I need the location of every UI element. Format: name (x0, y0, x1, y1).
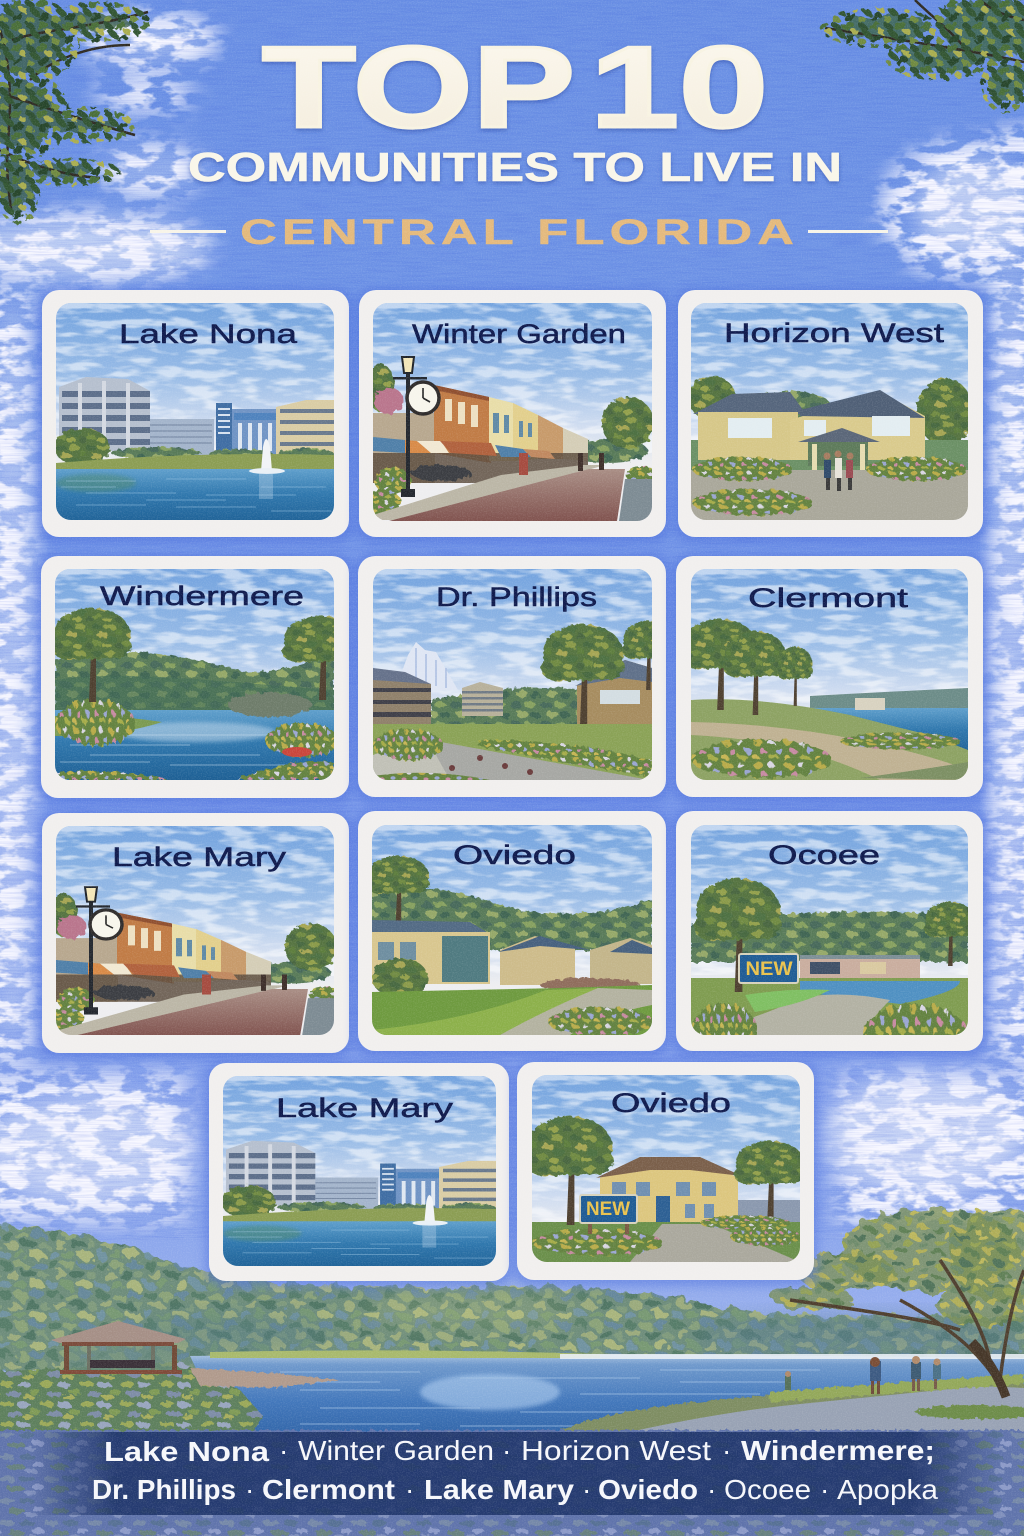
people on path (785, 1356, 941, 1394)
label: Lake Nona: Lake Nona (119, 319, 298, 349)
panel: Dr. Phillips (354, 554, 674, 803)
bottom list band (30, 1432, 1000, 1515)
panel: Lake Mary lakefront (205, 1061, 513, 1287)
illustration: home with NEW sign (526, 1075, 814, 1297)
walking path and bank (552, 1374, 1024, 1442)
corner tree: top left (0, 0, 150, 224)
label: Windermere: Windermere (100, 581, 304, 611)
list line 1: · (722, 1435, 731, 1466)
list line 1: Lake Nona (104, 1436, 269, 1467)
label: Winter Garden: Winter Garden (412, 319, 626, 349)
list line 1 (104, 1435, 935, 1467)
label: Oviedo: Oviedo (453, 840, 576, 870)
sign: NEW (580, 1195, 637, 1223)
illustration: park, buildings and pathways (373, 569, 652, 780)
label: Lake Mary: Lake Mary (112, 842, 287, 872)
panel: Lake Mary street (38, 811, 353, 1059)
list line 1: · (279, 1435, 288, 1466)
list line 2: · (405, 1474, 414, 1505)
list line 1: Horizon West (521, 1435, 711, 1466)
label: Horizon West: Horizon West (724, 318, 945, 348)
list line 2 (92, 1474, 938, 1505)
label: Lake Mary: Lake Mary (276, 1093, 454, 1123)
left shore plantings (0, 1362, 340, 1442)
corner tree: top right (820, 0, 1024, 113)
foreground foliage (0, 1430, 1024, 1536)
title: TOP 10: 10 (590, 22, 768, 152)
title: TOP 10: TOP (262, 22, 575, 152)
panel: Clermont (672, 554, 987, 803)
illustration: new-build homes and neighbours (688, 303, 973, 525)
list line 2: Ocoee (724, 1474, 811, 1505)
list line 2: Lake Mary (424, 1474, 574, 1505)
list line 1: Windermere; (741, 1435, 935, 1466)
panel: Windermere (37, 554, 362, 804)
illustration: chain of lakes (55, 569, 334, 780)
illustration: lake with fountain and offices (54, 303, 338, 525)
illustration: rolling hills and lake (682, 569, 973, 791)
list line 2: Oviedo (598, 1474, 698, 1505)
panel: Winter Garden (355, 288, 670, 543)
landscape: lake, hills and park (0, 1207, 1024, 1536)
list line 2: · (245, 1474, 254, 1505)
list line 2: Dr. Phillips (92, 1474, 236, 1505)
sign: NEW (739, 954, 798, 983)
icon: gazebo (51, 1321, 186, 1374)
band background (30, 1432, 1000, 1515)
panel: Oviedo campus (354, 809, 670, 1057)
illustration: main street with clock (56, 826, 334, 1035)
lake (190, 1350, 1024, 1440)
label: Oviedo: Oviedo (611, 1088, 731, 1118)
sign: NEW: NEW (586, 1199, 630, 1220)
panel: Oviedo homes (513, 1060, 818, 1297)
regional heading with rules: CENTRAL FLORIDA (240, 213, 794, 252)
large tree, lower right (772, 1207, 1024, 1397)
list line 1: Winter Garden (298, 1435, 494, 1466)
subtitle: communities to live in: COMMUNITIES TO LIVE IN (188, 144, 842, 190)
list line 2: · (820, 1474, 829, 1505)
illustration: new development, pool and sign (691, 825, 968, 1035)
illustration: lakefront offices and fountain (221, 1076, 500, 1270)
sign: NEW: NEW (746, 959, 793, 980)
label: Dr. Phillips: Dr. Phillips (436, 582, 597, 612)
illustration: downtown main street with clock (365, 303, 656, 525)
illustration: neighbourhood with lawn and path (366, 825, 654, 1047)
list line 2: · (582, 1474, 591, 1505)
panel: Lake Nona (38, 288, 353, 543)
title: TOP 10 (262, 22, 768, 152)
list line 1: · (502, 1435, 511, 1466)
list line 2: Clermont (262, 1474, 395, 1505)
panel: Ocoee (672, 809, 987, 1062)
panel: Horizon West (674, 288, 987, 543)
list line 2: · (707, 1474, 716, 1505)
label: Ocoee: Ocoee (768, 840, 880, 870)
list line 2: Apopka (837, 1474, 938, 1505)
label: Clermont: Clermont (748, 583, 909, 613)
hills (0, 1223, 1024, 1372)
